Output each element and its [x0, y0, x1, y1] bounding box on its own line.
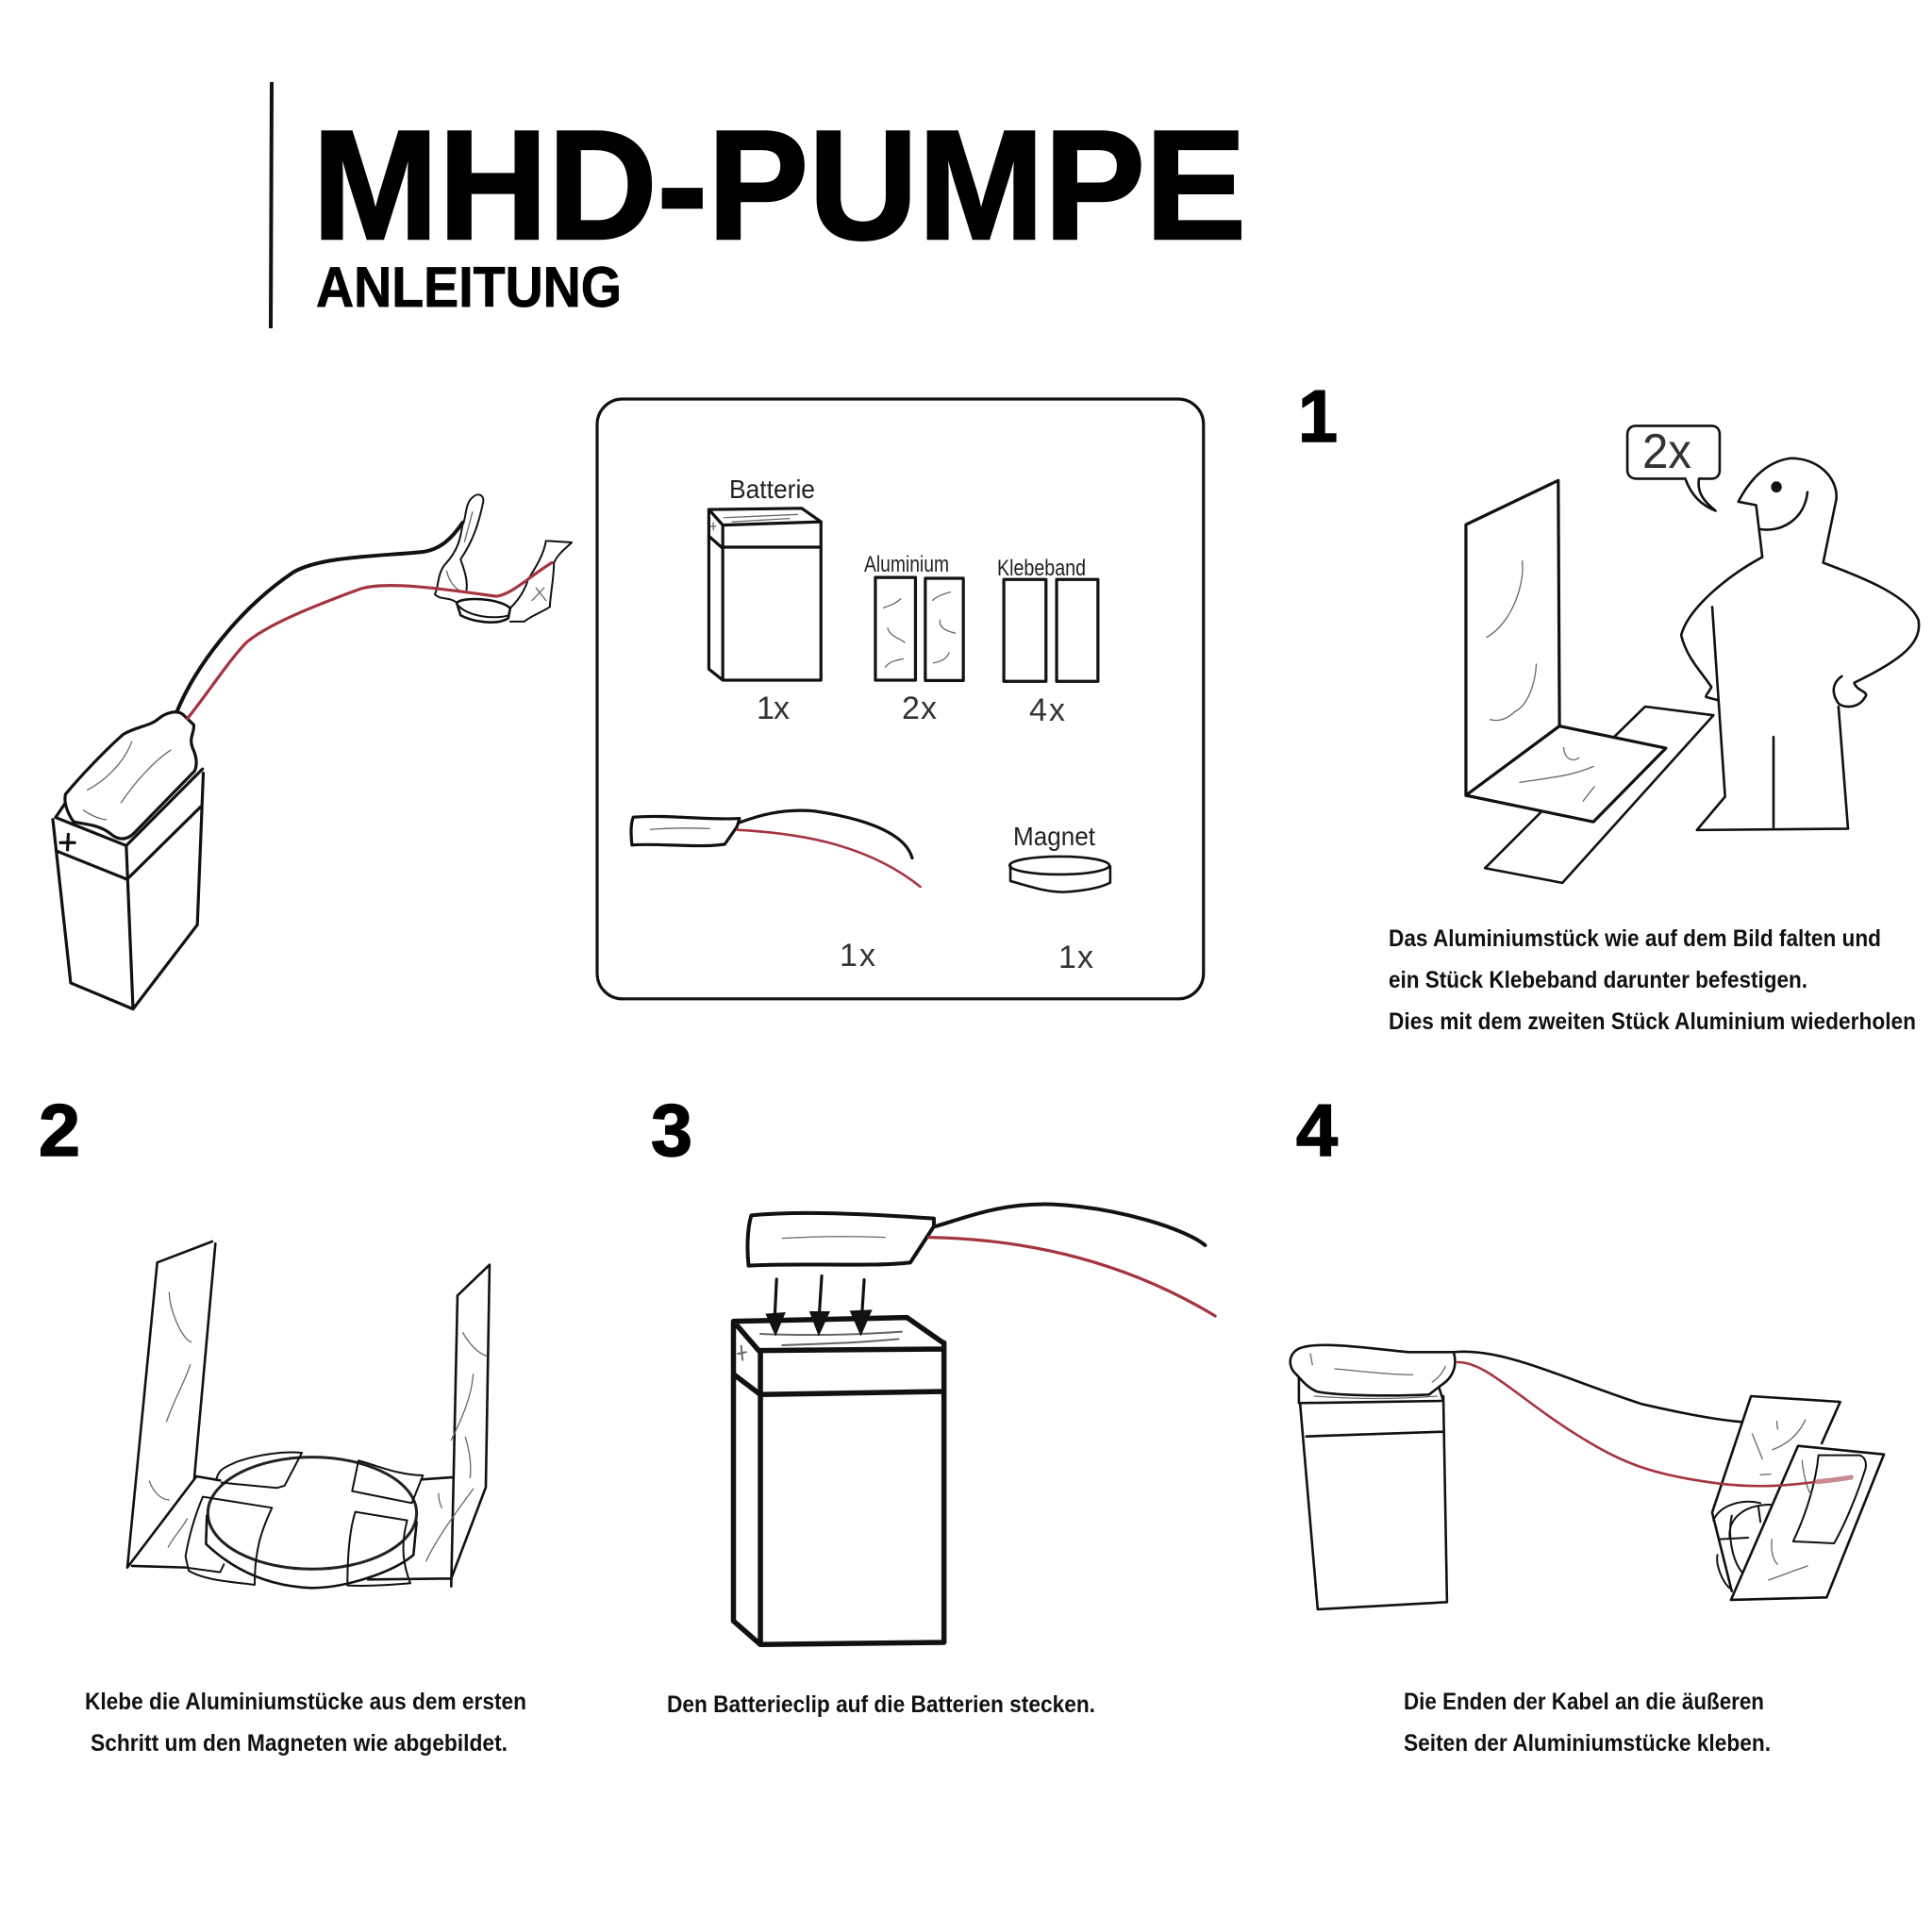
handwritten part labels: 1x — [840, 938, 875, 974]
folded aluminium — [1466, 480, 1559, 795]
part: battery clip — [631, 810, 921, 887]
foil and magnet assembly — [1712, 1396, 1884, 1600]
handwritten part labels: 1x — [1058, 940, 1093, 975]
step 4 text: Die Enden der Kabel an die äußeren — [1404, 1689, 1764, 1715]
speech bubble label: 2x — [1642, 425, 1691, 479]
step 1 text — [1389, 925, 1916, 1035]
handwritten part labels — [729, 475, 1095, 975]
step number 3: 3 — [651, 1089, 692, 1172]
step 1 text: ein Stück Klebeband darunter befestigen. — [1389, 967, 1807, 993]
panel: parts list — [597, 399, 1204, 999]
header — [271, 82, 1246, 328]
handwritten part labels: Magnet — [1013, 822, 1095, 851]
part: aluminium sheets — [875, 577, 963, 680]
character with speech bubble — [1627, 425, 1919, 830]
handwritten part labels: 1x — [757, 691, 790, 726]
header vertical rule — [271, 82, 272, 328]
handwritten part labels: 2x — [902, 691, 937, 726]
illustration: finished pump — [53, 494, 572, 1009]
step 2 text — [85, 1689, 526, 1757]
arrows down — [765, 1276, 873, 1337]
step number 4: 4 — [1296, 1089, 1338, 1172]
step 4 text — [1404, 1689, 1771, 1757]
red wire — [1457, 1362, 1851, 1486]
handwritten part labels: Aluminium — [864, 552, 949, 577]
part: magnet — [1009, 857, 1110, 892]
handwritten part labels: 4x — [1029, 692, 1065, 728]
tape strip — [1485, 707, 1713, 883]
step number 2: 2 — [39, 1089, 80, 1172]
illustration: step 2 foil around magnet — [127, 1241, 490, 1588]
illustration: step 1 folding foil — [1466, 425, 1919, 883]
step 2 text: Schritt um den Magneten wie abgebildet. — [91, 1730, 508, 1757]
black wire — [1454, 1352, 1742, 1422]
title: MHD-PUMPE — [312, 98, 1246, 272]
illustration: step 3 clip on battery — [733, 1205, 1215, 1644]
handwritten part labels: Batterie — [729, 475, 815, 504]
battery — [733, 1318, 944, 1644]
battery with clip — [1291, 1345, 1455, 1609]
step 1 text: Das Aluminiumstück wie auf dem Bild falten und — [1389, 925, 1881, 952]
part: battery — [708, 508, 821, 680]
step 2 text: Klebe die Aluminiumstücke aus dem ersten — [85, 1689, 526, 1715]
parts frame — [597, 399, 1204, 999]
step number 1: 1 — [1298, 375, 1338, 458]
step 3 text: Den Batterieclip auf die Batterien stecken. — [667, 1691, 1095, 1718]
step 4 text: Seiten der Aluminiumstücke kleben. — [1404, 1730, 1771, 1757]
subtitle: ANLEITUNG — [316, 256, 622, 319]
battery clip — [747, 1205, 1215, 1316]
illustration: step 4 wires on foil — [1291, 1345, 1884, 1609]
part: adhesive tape — [1004, 579, 1098, 681]
handwritten part labels: Klebeband — [997, 556, 1086, 581]
